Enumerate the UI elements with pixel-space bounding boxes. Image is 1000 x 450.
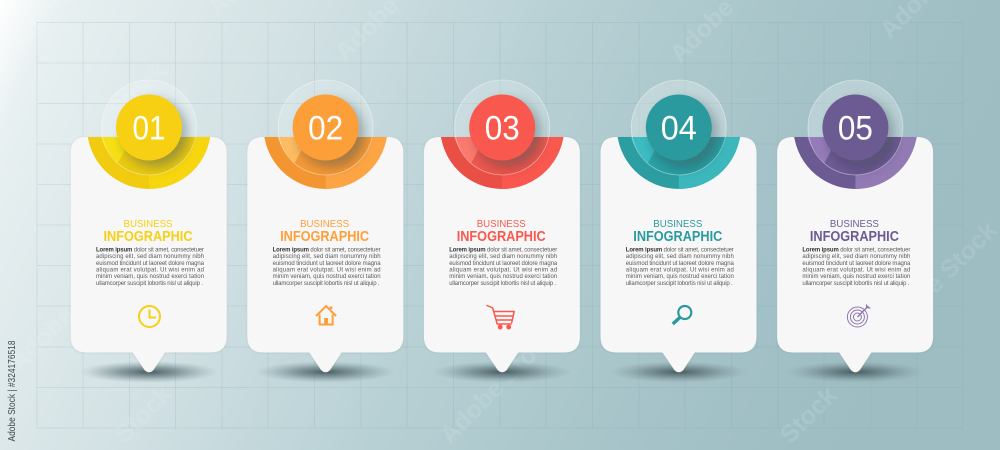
half circle <box>618 137 740 189</box>
heading: BUSINESS <box>300 218 349 230</box>
icon: clock <box>139 306 160 327</box>
panel: step 04: INFOGRAPHIC <box>633 229 723 245</box>
heading: BUSINESS <box>653 218 702 230</box>
body text: minim veniam, quis nostrud exerci tation <box>449 274 557 280</box>
body text <box>626 248 734 287</box>
body text: minim veniam, quis nostrud exerci tation <box>96 274 204 280</box>
card <box>247 137 403 372</box>
icon: target <box>847 304 870 327</box>
card <box>600 137 756 372</box>
body text: aliquam erat volutpat. Ut wisi enim ad <box>96 268 204 274</box>
body text: euismod tincidunt ut laoreet dolore magna <box>626 261 734 267</box>
panel: step 03 <box>424 65 580 383</box>
body text <box>273 248 381 287</box>
body text <box>96 248 205 287</box>
body text: Lorem ipsum dolor sit amet, consectetuer <box>626 248 734 254</box>
number badge: 03 <box>485 110 520 148</box>
body text: aliquam erat volutpat. Ut wisi enim ad <box>273 268 381 274</box>
glass ring <box>631 80 726 175</box>
panel: step 01 <box>71 65 227 383</box>
body text: Lorem ipsum dolor sit amet, consectetuer <box>802 248 910 254</box>
body text: ullamcorper suscipit lobortis nisl ut aliquip . <box>626 281 733 287</box>
panel: step 02 <box>247 65 403 383</box>
half circle <box>441 137 564 189</box>
body text: adipiscing elit, sed diam nonummy nibh <box>273 254 381 260</box>
body text: aliquam erat volutpat. Ut wisi enim ad <box>449 268 557 274</box>
body text: Lorem ipsum dolor sit amet, consectetuer <box>273 248 381 254</box>
body text: euismod tincidunt ut laoreet dolore magna <box>96 261 205 267</box>
number badge <box>116 94 188 165</box>
card shadow <box>609 361 749 383</box>
body text: ullamcorper suscipit lobortis nisl ut aliquip . <box>802 281 910 287</box>
number badge: 05 <box>838 110 873 148</box>
body text <box>449 248 558 287</box>
heading: BUSINESS <box>477 218 526 230</box>
glass ring <box>455 80 550 175</box>
watermark text: Stock <box>104 56 172 124</box>
panel: step 03: INFOGRAPHIC <box>457 229 546 245</box>
body text: euismod tincidunt ut laoreet dolore magna <box>802 261 911 267</box>
glass ring <box>278 80 373 175</box>
body text: minim veniam, quis nostrud exerci tation <box>273 274 381 280</box>
card shadow <box>432 361 572 383</box>
body text: ullamcorper suscipit lobortis nisl ut aliquip . <box>96 281 203 287</box>
body text: aliquam erat volutpat. Ut wisi enim ad <box>802 268 910 274</box>
panel: step 05: INFOGRAPHIC <box>810 229 899 245</box>
body text: adipiscing elit, sed diam nonummy nibh <box>96 254 204 260</box>
body text: adipiscing elit, sed diam nonummy nibh <box>802 254 910 260</box>
body text: Lorem ipsum dolor sit amet, consectetuer <box>96 248 204 254</box>
glass ring <box>102 80 196 175</box>
panel: step 01: INFOGRAPHIC <box>104 229 193 245</box>
half circle <box>794 137 917 189</box>
half circle <box>88 137 210 189</box>
card shadow <box>256 361 396 383</box>
body text: adipiscing elit, sed diam nonummy nibh <box>449 254 557 260</box>
panel: step 05 <box>777 65 933 383</box>
watermark text: Stock <box>109 380 177 448</box>
card <box>777 137 933 372</box>
body text: aliquam erat volutpat. Ut wisi enim ad <box>626 268 734 274</box>
body text: Lorem ipsum dolor sit amet, consectetuer <box>449 248 557 254</box>
number badge: 02 <box>308 110 343 148</box>
body text: adipiscing elit, sed diam nonummy nibh <box>626 254 734 260</box>
watermark text: Adobe <box>4 301 79 376</box>
heading: BUSINESS <box>830 218 879 230</box>
number badge: 01 <box>132 110 166 148</box>
number badge <box>469 94 541 165</box>
number badge <box>293 94 365 165</box>
card <box>71 137 227 372</box>
body text: euismod tincidunt ut laoreet dolore magna <box>449 261 558 267</box>
side credit: Adobe Stock | #324176518 <box>7 340 18 442</box>
body text: minim veniam, quis nostrud exerci tation <box>802 274 910 280</box>
number badge: 04 <box>661 110 697 148</box>
icon: house <box>316 306 336 324</box>
body text: ullamcorper suscipit lobortis nisl ut aliquip . <box>449 281 557 287</box>
number badge <box>646 94 718 165</box>
icon: shopping cart <box>487 306 514 329</box>
heading: BUSINESS <box>124 218 172 230</box>
body text <box>802 248 911 287</box>
glass ring <box>808 80 903 175</box>
card shadow <box>785 361 925 383</box>
watermark text: Adobe Stock <box>874 216 1000 344</box>
panel: step 02: INFOGRAPHIC <box>280 229 370 245</box>
card <box>424 137 580 372</box>
card shadow <box>79 361 219 383</box>
body text: euismod tincidunt ut laoreet dolore magna <box>273 261 381 267</box>
icon: magnifier <box>673 306 691 324</box>
panel: step 04 <box>600 65 756 383</box>
watermark text: Adobe Stock <box>434 321 562 449</box>
number badge <box>822 94 894 165</box>
half circle <box>264 137 387 189</box>
body text: minim veniam, quis nostrud exerci tation <box>626 274 734 280</box>
watermark text: Stock <box>774 381 842 449</box>
body text: ullamcorper suscipit lobortis nisl ut aliquip . <box>273 281 380 287</box>
